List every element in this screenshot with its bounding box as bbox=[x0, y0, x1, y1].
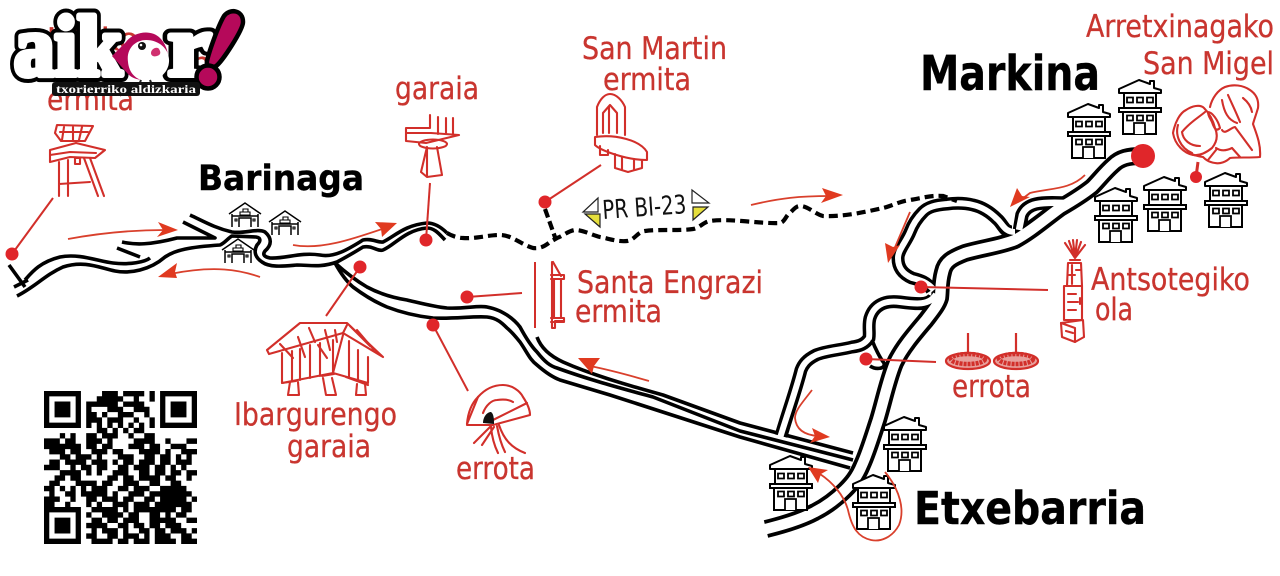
icon: Antsotegiko forge tower bbox=[1061, 240, 1085, 342]
label: San Martin ermita: ermita bbox=[603, 62, 691, 98]
label: Antsotegiko ola: Antsotegiko bbox=[1091, 262, 1250, 298]
label behind logo: ermita: Uleko bbox=[47, 22, 139, 58]
label: Antsotegiko ola: ola bbox=[1095, 292, 1133, 328]
icon: horreo granary bbox=[267, 323, 383, 395]
label: Ibargurengo garaia: Ibargurengo bbox=[234, 397, 397, 433]
label: Santa Engrazi ermita: ermita bbox=[575, 294, 662, 330]
label: Arretxinagako San Migel bbox=[1086, 9, 1274, 82]
icon: mill wheel dark core bbox=[483, 412, 494, 424]
logo: aikor bbox=[14, 0, 243, 96]
town name: Etxebarria: Etxebarria bbox=[914, 482, 1146, 535]
route markers bbox=[6, 144, 1202, 366]
arrow: loop around Etxebarria house bbox=[808, 467, 901, 540]
logo bird bbox=[112, 32, 169, 85]
label: Ibargurengo garaia: garaia bbox=[287, 429, 371, 465]
arrow: from Markina bbox=[1010, 175, 1085, 207]
icon: San Martin chapel bbox=[595, 94, 647, 172]
label: errota west: errota bbox=[456, 451, 535, 487]
logo: aikor: aik bbox=[14, 0, 122, 94]
label: Santa Engrazi ermita bbox=[575, 265, 763, 330]
logo tagline: txorierriko aldizkaria bbox=[56, 82, 196, 96]
logo: aikor: r bbox=[168, 0, 212, 94]
label behind logo: ermita: ermita bbox=[47, 82, 134, 118]
logo exclamation mark bbox=[196, 11, 243, 89]
trail sign: PR BI-23: PR BI-23 bbox=[601, 190, 687, 226]
icon: watch tower bbox=[50, 125, 105, 196]
road: east main road, Markina fork and loops bbox=[762, 156, 1146, 530]
dashed trail: PR BI-23 bbox=[447, 196, 957, 248]
arrow: curve to junction bbox=[795, 390, 830, 443]
label: Ibargurengo garaia bbox=[234, 397, 397, 465]
arrow: east towards garaia bbox=[293, 222, 397, 246]
houses: Barinaga bbox=[222, 203, 301, 263]
label: San Martin ermita: San Martin bbox=[582, 31, 727, 67]
label: garaia: garaia bbox=[395, 71, 479, 107]
arrow: along dashed trail bbox=[751, 188, 843, 205]
logo: aikor: r bbox=[168, 0, 212, 94]
arrow: east along west road bbox=[68, 222, 178, 239]
road: south section to Etxebarria bbox=[335, 263, 853, 468]
connector: rocks stem bbox=[1196, 162, 1198, 177]
town name: Markina: Markina bbox=[920, 46, 1100, 102]
icon: Santa Engrazi column bbox=[551, 262, 564, 328]
icon: water mill fan bbox=[467, 385, 530, 453]
red connector lines bbox=[12, 165, 1048, 391]
label: San Martin ermita bbox=[582, 31, 727, 98]
arrow: down the loop bbox=[885, 212, 910, 263]
icon: Arretxinaga rocks bbox=[1173, 85, 1260, 163]
icon: garaia column bbox=[406, 115, 459, 177]
QR code bbox=[41, 388, 200, 547]
arrow: west below Barinaga bbox=[158, 263, 260, 278]
label behind logo: ermita: n bbox=[191, 46, 211, 82]
arrow: along south road bbox=[578, 358, 649, 381]
houses: Etxebarria bbox=[770, 417, 926, 529]
road: west section through Barinaga to garaia bbox=[9, 215, 447, 296]
label: errota east: errota bbox=[952, 369, 1031, 405]
town name: Barinaga: Barinaga bbox=[198, 159, 364, 199]
icon: millstones bbox=[946, 333, 1038, 369]
houses: Markina bbox=[1068, 80, 1247, 242]
label: Antsotegiko ola bbox=[1091, 262, 1250, 328]
logo: aikor: aik bbox=[14, 0, 122, 94]
label: Santa Engrazi ermita: Santa Engrazi bbox=[577, 265, 763, 301]
label behind logo: ermita bbox=[47, 22, 211, 118]
